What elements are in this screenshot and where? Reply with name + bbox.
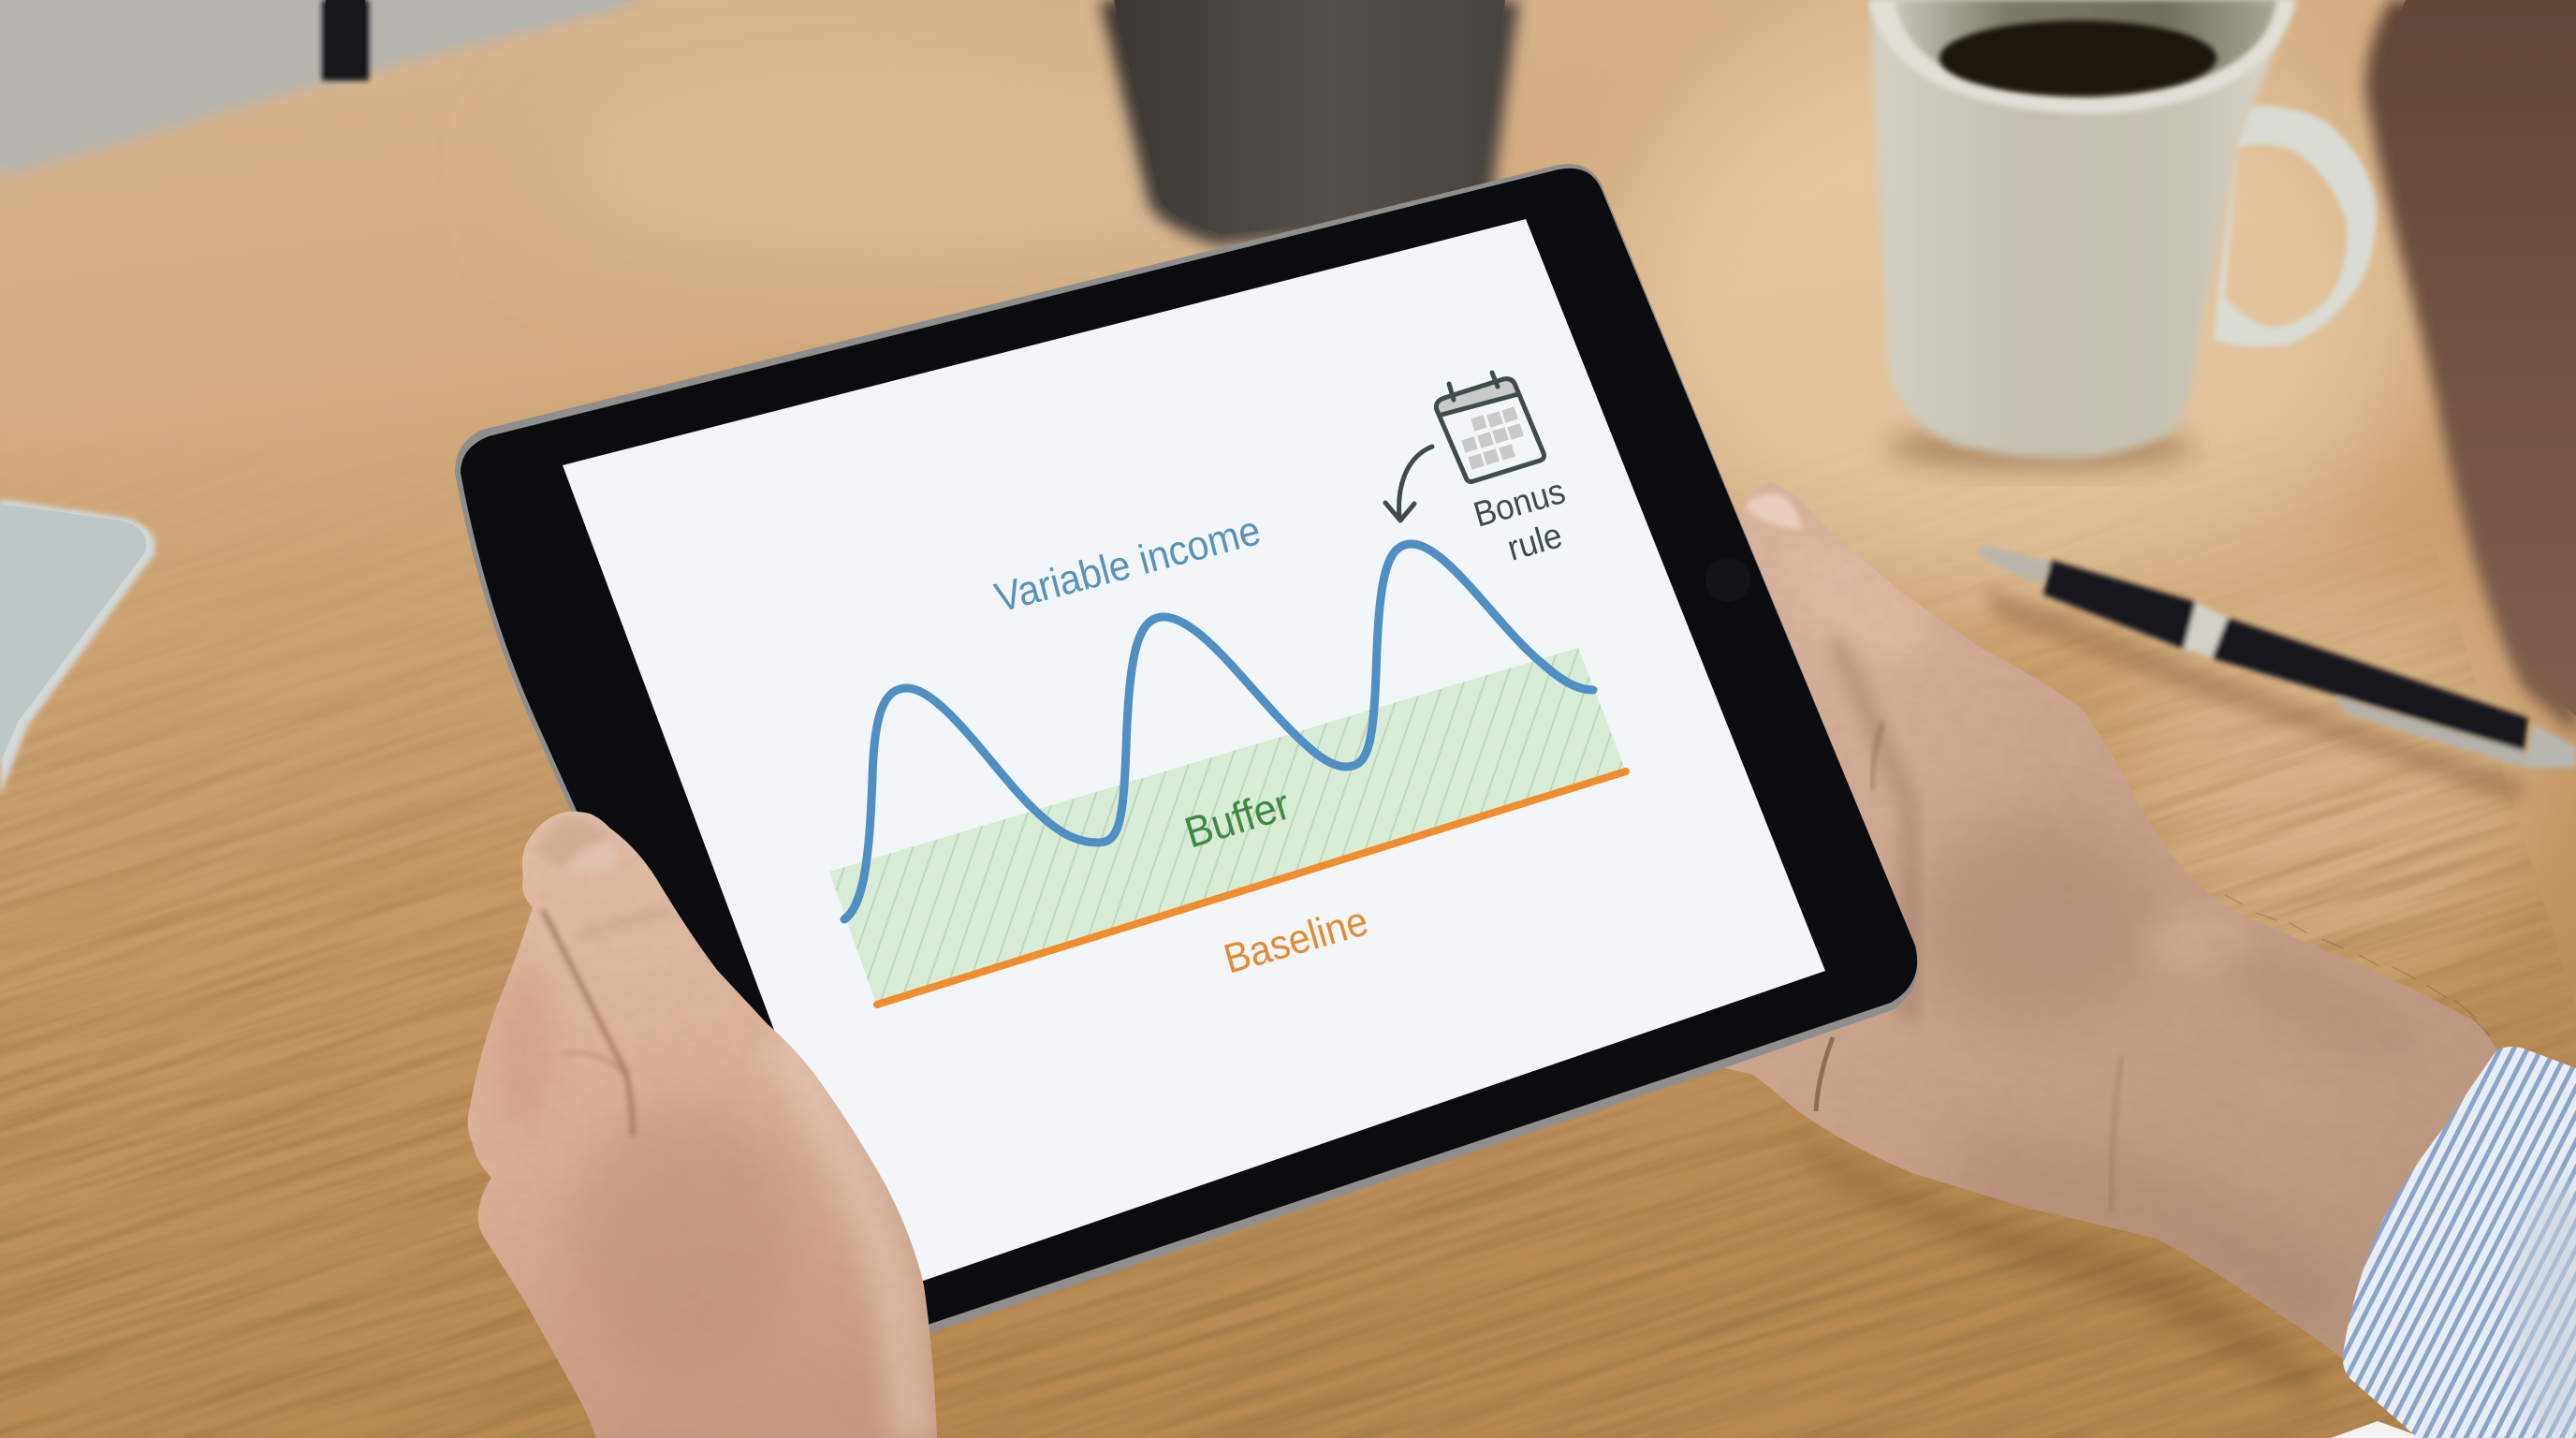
icon: calendar bbox=[1436, 373, 1544, 481]
tablet bezel bbox=[461, 169, 1917, 1359]
label: bonus rule bbox=[1470, 471, 1570, 568]
pen bbox=[1980, 545, 2576, 805]
baseline line bbox=[877, 771, 1626, 1005]
tablet sensor bbox=[1705, 557, 1750, 602]
tablet screen bbox=[563, 219, 1825, 1298]
blurred background wall bbox=[0, 0, 657, 179]
plant pot bbox=[1100, 0, 1519, 245]
tablet bbox=[455, 164, 1918, 1369]
label: bonus rule: rule bbox=[1503, 515, 1566, 568]
chart bbox=[829, 507, 1626, 1006]
wrist hair bbox=[2225, 895, 2490, 1036]
label: buffer: Buffer bbox=[1179, 780, 1295, 858]
tablet metal edge bbox=[455, 164, 1918, 1369]
right hand bbox=[1685, 477, 2509, 1404]
coffee mug bbox=[1868, 0, 2377, 472]
variable income curve bbox=[844, 544, 1593, 919]
left hand bbox=[468, 805, 945, 1438]
person's shoulder blurred at the edge bbox=[2365, 0, 2576, 735]
label: baseline: Baseline bbox=[1219, 898, 1373, 983]
shirt cuff bbox=[2331, 1047, 2576, 1438]
arrow: bonus to peak bbox=[1385, 447, 1432, 521]
label: bonus rule: Bonus bbox=[1470, 471, 1570, 535]
buffer band bbox=[829, 648, 1626, 1006]
laptop corner bbox=[0, 499, 155, 796]
label: variable income: Variable income bbox=[990, 507, 1266, 622]
